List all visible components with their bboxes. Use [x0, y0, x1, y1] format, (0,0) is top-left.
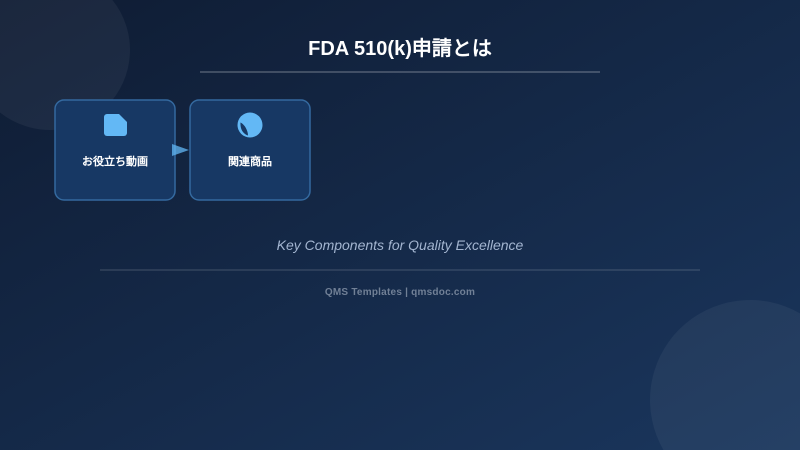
arrow [172, 144, 189, 156]
label: お役立ち動画: お役立ち動画 [82, 156, 148, 168]
footer: QMS Templates | qmsdoc.com [325, 287, 475, 298]
panel: 関連商品 [189, 99, 311, 201]
panel: お役立ち動画 [54, 99, 176, 201]
title: FDA 510(k)申請とは [308, 38, 492, 60]
subtitle: Key Components for Quality Excellence [277, 237, 523, 253]
label: 関連商品: 関連商品 [228, 156, 272, 168]
